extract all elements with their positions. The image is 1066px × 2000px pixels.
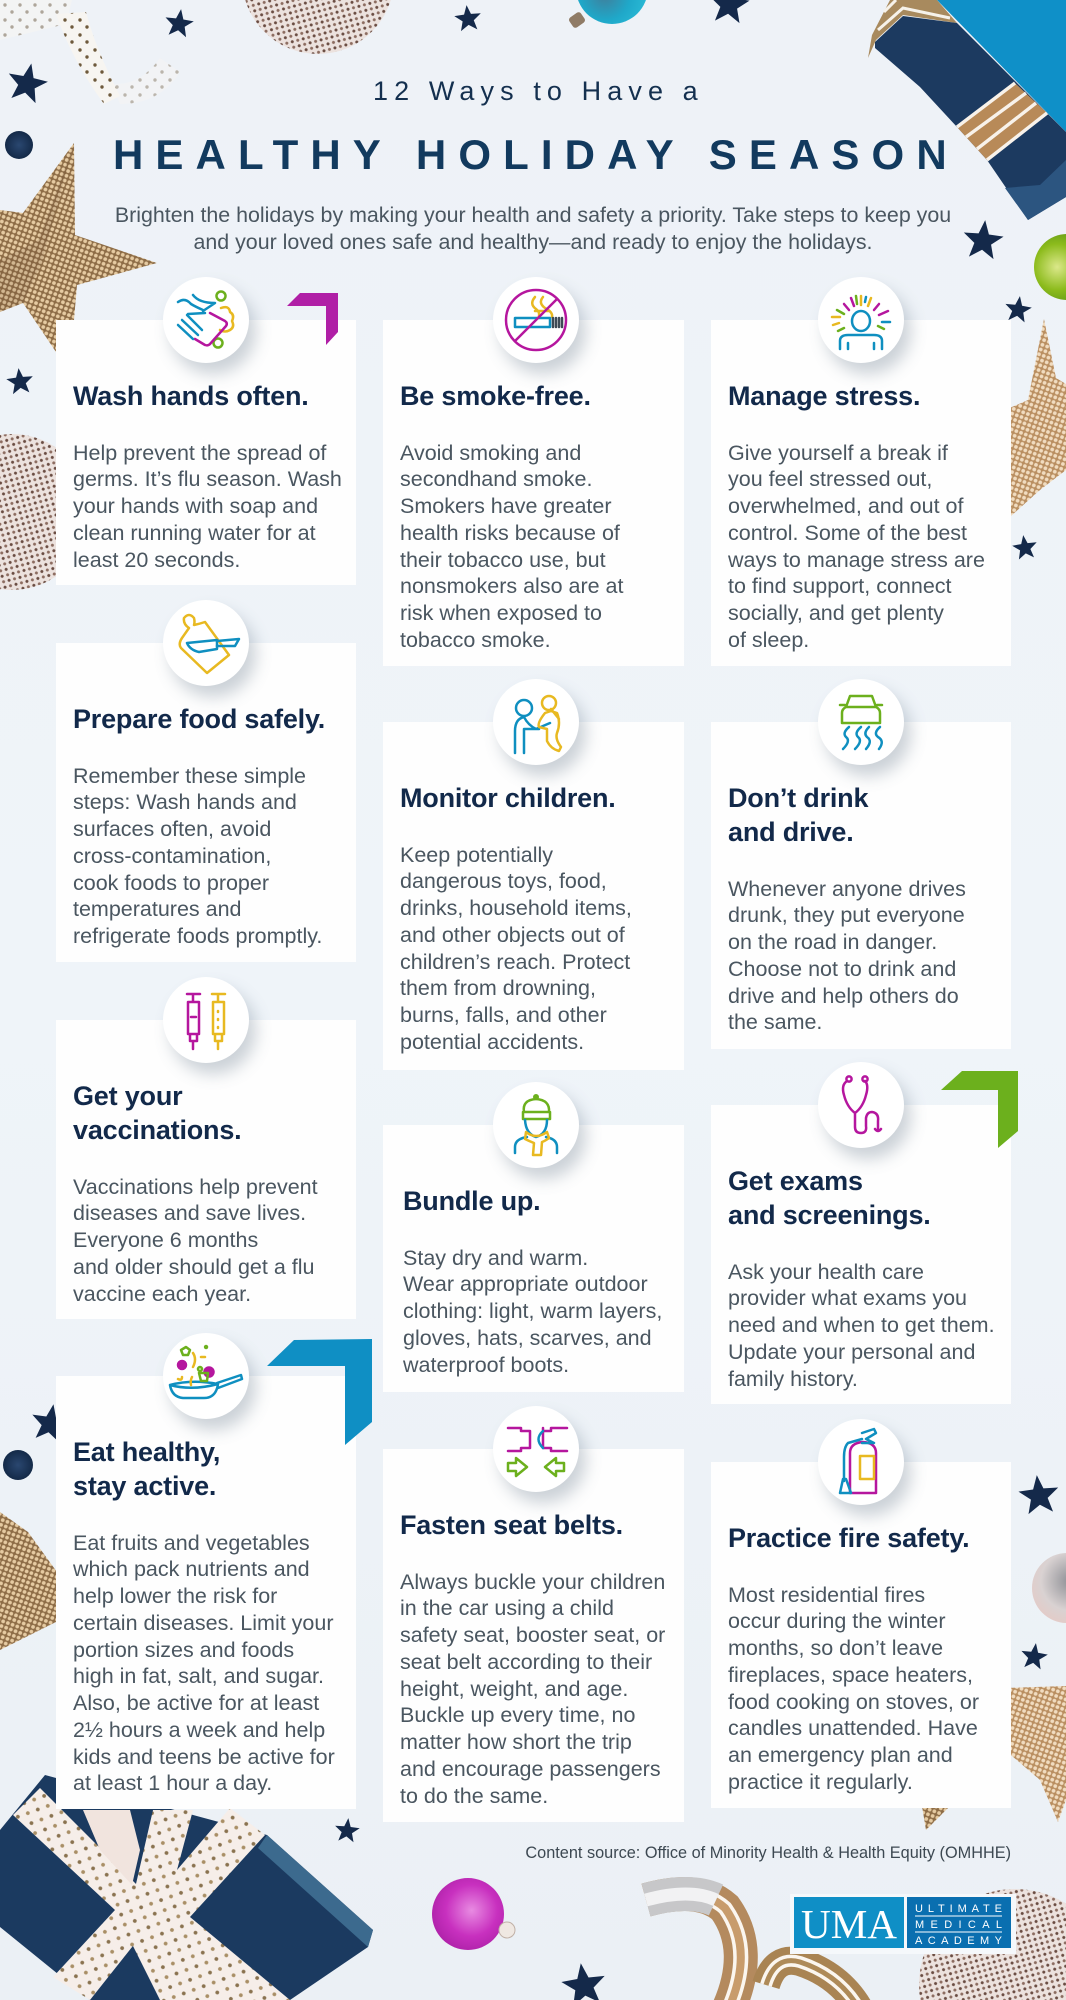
heading — [73, 1081, 241, 1144]
decoration: peach star lower right — [922, 1686, 1066, 1830]
body text: drinks, household items, — [400, 896, 632, 920]
panel: Manage stress — [711, 277, 1011, 666]
body text: portion sizes and foods — [73, 1638, 294, 1662]
body text: health risks because of — [400, 521, 620, 545]
panel: Eat healthy, stay active — [56, 1333, 356, 1809]
heading: stay active. — [73, 1470, 216, 1500]
decoration: dark berries — [3, 131, 33, 1480]
heading: Manage stress. — [728, 381, 920, 411]
body text — [73, 1174, 318, 1306]
logo: Ultimate Medical Academy: MEDICAL — [915, 1919, 1002, 1931]
body text: their tobacco use, but — [400, 548, 606, 572]
body text: seat belt according to their — [400, 1650, 652, 1674]
body text: your hands with soap and — [73, 494, 318, 518]
body text: Ask your health care — [728, 1260, 924, 1284]
body text: in the car using a child — [400, 1596, 614, 1620]
body text: Avoid smoking and — [400, 440, 581, 464]
body text: which pack nutrients and — [73, 1557, 310, 1581]
body text: Buckle up every time, no — [400, 1703, 635, 1727]
body text: vaccine each year. — [73, 1282, 251, 1306]
body text: occur during the winter — [728, 1609, 946, 1633]
body text: at least 1 hour a day. — [73, 1771, 272, 1795]
body text: Remember these simple — [73, 764, 306, 788]
body text: least 20 seconds. — [73, 548, 240, 572]
body text: refrigerate foods promptly. — [73, 924, 322, 948]
body text: burns, falls, and other — [400, 1003, 607, 1027]
body text — [728, 1260, 995, 1390]
body text: clothing: light, warm layers, — [403, 1299, 662, 1323]
body text: surfaces often, avoid — [73, 817, 271, 841]
body text: gloves, hats, scarves, and — [403, 1326, 652, 1350]
body text: need and when to get them. — [728, 1313, 995, 1337]
body text: tobacco smoke. — [400, 628, 551, 652]
body text: months, so don’t leave — [728, 1636, 943, 1660]
body text: Keep potentially — [400, 842, 553, 866]
body text: waterproof boots. — [403, 1352, 569, 1376]
body text: socially, and get plenty — [728, 601, 944, 625]
icon: stethoscope — [818, 1062, 904, 1148]
intro text: and your loved ones safe and healthy—and ready to enjoy the holidays. — [193, 230, 873, 254]
decoration: lime ornament right — [1034, 234, 1066, 300]
body text: children’s reach. Protect — [400, 950, 630, 974]
decoration: striped ribbon bottom right — [646, 1894, 860, 2000]
body text: ways to manage stress are — [728, 548, 985, 572]
panel: Get exams and screenings — [711, 1062, 1011, 1404]
decoration: gold star lower left — [0, 1512, 70, 1650]
heading: Don’t drink — [728, 783, 868, 813]
icon: cutting board and knife — [163, 600, 249, 686]
body text — [728, 1582, 979, 1794]
body text: cook foods to proper — [73, 870, 269, 894]
body text: food cooking on stoves, or — [728, 1690, 979, 1714]
heading: Get exams — [728, 1166, 863, 1196]
body text: family history. — [728, 1366, 858, 1390]
decoration: gold star right — [1005, 319, 1066, 516]
body text: drunk, they put everyone — [728, 903, 965, 927]
body text: steps: Wash hands and — [73, 790, 297, 814]
body text: Always buckle your children — [400, 1570, 665, 1594]
body text: cross-contamination, — [73, 844, 271, 868]
body text: safety seat, booster seat, or — [400, 1623, 665, 1647]
heading: and screenings. — [728, 1200, 931, 1230]
body text — [73, 1530, 335, 1795]
decoration: large gold star left — [0, 143, 157, 352]
decoration: top teal ornament — [568, 0, 648, 29]
body text: potential accidents. — [400, 1030, 584, 1054]
body text: Eat fruits and vegetables — [73, 1530, 310, 1554]
decoration: top-right wrapped gift — [868, 0, 1066, 220]
heading: Fasten seat belts. — [400, 1510, 623, 1540]
heading: Practice fire safety. — [728, 1523, 969, 1553]
icon: seat belt buckle — [493, 1406, 579, 1492]
body text: 2½ hours a week and help — [73, 1718, 325, 1742]
panel: Prepare food safely — [56, 600, 356, 962]
body text: overwhelmed, and out of — [728, 494, 963, 518]
body text: kids and teens be active for — [73, 1744, 335, 1768]
body text: Whenever anyone drives — [728, 876, 966, 900]
body text: fireplaces, space heaters, — [728, 1663, 973, 1687]
body text: Most residential fires — [728, 1582, 925, 1606]
body text: help lower the risk for — [73, 1584, 277, 1608]
body text — [400, 1570, 665, 1808]
body text: Choose not to drink and — [728, 957, 956, 981]
panel: Don't drink and drive — [711, 679, 1011, 1049]
body text — [400, 842, 632, 1054]
decoration: silver ornament right — [1032, 1553, 1066, 1623]
subtitle: 12 Ways to Have a: 12 Ways to Have a — [373, 76, 704, 106]
icon: fire extinguisher — [818, 1419, 904, 1505]
panel: Practice fire safety — [711, 1419, 1011, 1808]
panel: Get your vaccinations — [56, 977, 356, 1319]
body text: to find support, connect — [728, 574, 952, 598]
body text: dangerous toys, food, — [400, 869, 607, 893]
icon: no smoking — [493, 277, 579, 363]
body text: the same. — [728, 1010, 822, 1034]
body text: control. Some of the best — [728, 521, 967, 545]
body text: matter how short the trip — [400, 1730, 632, 1754]
body text: Also, be active for at least — [73, 1691, 319, 1715]
panel: Monitor children — [383, 679, 684, 1070]
heading — [728, 1166, 931, 1230]
content source: Content source: Office of Minority Health & Health Equity (OMHHE) — [525, 1844, 1011, 1862]
intro text: Brighten the holidays by making your health and safety a priority. Take steps to keep you — [115, 203, 951, 227]
body text: candles unattended. Have — [728, 1716, 978, 1740]
heading: Prepare food safely. — [73, 704, 325, 734]
heading: vaccinations. — [73, 1114, 241, 1144]
body text: Update your personal and — [728, 1340, 975, 1364]
decoration: top speckled ornament — [242, 0, 394, 54]
body text: you feel stressed out, — [728, 467, 932, 491]
body text: nonsmokers also are at — [400, 574, 623, 598]
heading: and drive. — [728, 816, 854, 846]
body text: height, weight, and age. — [400, 1676, 628, 1700]
heading: Get your — [73, 1081, 182, 1111]
decoration: top-right blue corner — [937, 0, 1066, 132]
body text: provider what exams you — [728, 1286, 967, 1310]
decoration: speckled ornament left — [0, 434, 90, 590]
body text: Wear appropriate outdoor — [403, 1272, 648, 1296]
icon: car on wavy road — [818, 679, 904, 765]
body text: Stay dry and warm. — [403, 1246, 588, 1270]
body text — [403, 1246, 662, 1376]
body text: and older should get a flu — [73, 1255, 314, 1279]
logo: Ultimate Medical Academy: ACADEMY — [915, 1935, 1003, 1947]
body text: Everyone 6 months — [73, 1228, 258, 1252]
body text: an emergency plan and — [728, 1743, 953, 1767]
body text: diseases and save lives. — [73, 1201, 306, 1225]
body text: Help prevent the spread of — [73, 440, 326, 464]
heading: Be smoke-free. — [400, 381, 591, 411]
heading — [73, 1437, 220, 1500]
heading: Eat healthy, — [73, 1437, 220, 1467]
icon: person in hat and scarf — [493, 1082, 579, 1168]
decoration: bottom-left gift box with ribbon — [0, 1775, 373, 2000]
logo: Ultimate Medical Academy: UMA — [801, 1901, 897, 1947]
body text: and other objects out of — [400, 923, 625, 947]
decoration: top-left dotted ribbons — [0, 0, 180, 104]
accent: green corner — [941, 1071, 1018, 1148]
panel: Bundle up — [383, 1082, 684, 1392]
body text: risk when exposed to — [400, 601, 602, 625]
body text — [400, 440, 624, 652]
body text: them from drowning, — [400, 976, 596, 1000]
body text: Give yourself a break if — [728, 440, 948, 464]
icon: washing hands — [163, 277, 249, 363]
icon: two syringes — [163, 977, 249, 1063]
panel: Fasten seat belts — [383, 1406, 684, 1822]
accent: magenta corner — [287, 293, 338, 345]
icon: stressed person with rays — [818, 277, 904, 363]
body text — [728, 440, 985, 652]
body text — [73, 440, 342, 572]
heading: Healthy Holiday Season: HEALTHY HOLIDAY SEASON — [113, 131, 959, 178]
body text — [728, 876, 966, 1034]
heading — [728, 783, 868, 846]
body text: clean running water for at — [73, 521, 316, 545]
logo: Ultimate Medical Academy — [790, 1894, 1016, 1954]
heading: Wash hands often. — [73, 381, 309, 411]
body text: germs. It’s flu season. Wash — [73, 467, 342, 491]
body text: Smokers have greater — [400, 494, 612, 518]
body text: on the road in danger. — [728, 930, 937, 954]
body text: of sleep. — [728, 628, 809, 652]
panel: Be smoke-free — [383, 277, 684, 666]
heading: Bundle up. — [403, 1186, 540, 1216]
body text: secondhand smoke. — [400, 467, 592, 491]
icon: frying pan with vegetables — [163, 1333, 249, 1419]
body text: practice it regularly. — [728, 1770, 913, 1794]
intro text — [115, 203, 951, 254]
accent: blue corner — [267, 1339, 372, 1445]
main title — [113, 76, 959, 178]
body text: high in fat, salt, and sugar. — [73, 1664, 324, 1688]
decoration: magenta ornament — [432, 1878, 515, 1950]
body text: temperatures and — [73, 897, 242, 921]
body text: certain diseases. Limit your — [73, 1611, 334, 1635]
body text: and encourage passengers — [400, 1757, 661, 1781]
heading: Monitor children. — [400, 783, 616, 813]
body text: to do the same. — [400, 1784, 548, 1808]
panel: Wash hands often — [56, 277, 356, 585]
icon: adult holding child — [493, 679, 579, 765]
body text — [73, 764, 322, 948]
decoration: speckled ornament bottom right — [919, 1889, 1066, 2000]
body text: drive and help others do — [728, 984, 959, 1008]
body text: Vaccinations help prevent — [73, 1174, 318, 1198]
logo: Ultimate Medical Academy: ULTIMATE — [915, 1903, 1002, 1915]
